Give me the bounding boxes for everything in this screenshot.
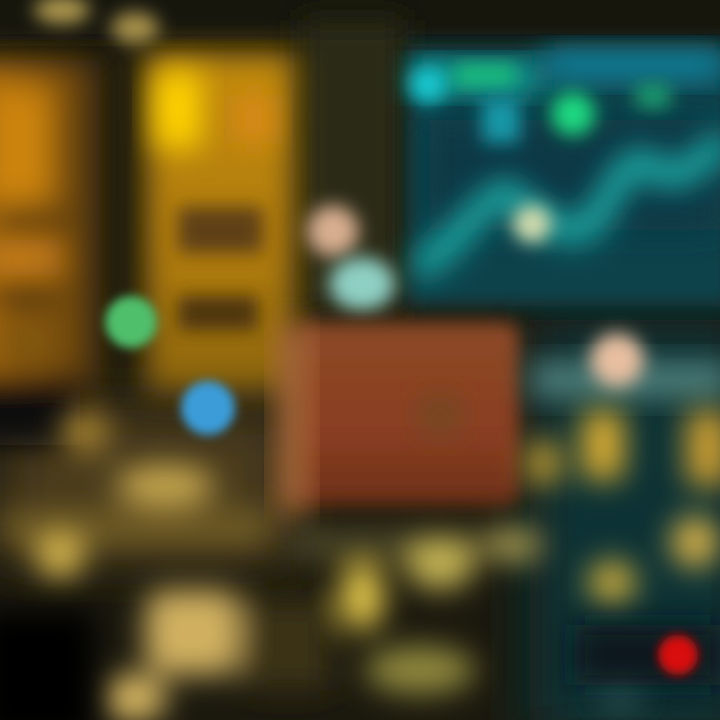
- panel: center golden shelf: [145, 52, 295, 392]
- icon: green dot: [105, 296, 157, 348]
- grey teal band: [530, 362, 720, 398]
- bright yellow book: [155, 72, 201, 148]
- icon: blue dot: [181, 381, 235, 435]
- panel: chart screen: [408, 44, 720, 306]
- figure: small person: [307, 205, 395, 311]
- green blob: [455, 65, 515, 85]
- icon: red dot: [658, 635, 698, 675]
- coins: lower gold pile: [0, 410, 644, 720]
- shelf slot lower: [178, 296, 258, 330]
- icon: wallet: [278, 322, 520, 515]
- green marker: [551, 92, 595, 136]
- panel: left golden shelf: [0, 60, 100, 445]
- dark corner bottom left: [0, 610, 95, 720]
- cyan blob: [410, 67, 446, 103]
- body: [329, 257, 395, 311]
- coins: right gold stacks: [525, 410, 720, 604]
- head: [590, 333, 644, 387]
- teal block: [482, 98, 520, 143]
- coins: top lights: [34, 0, 159, 44]
- dark block bottom right: [575, 625, 720, 685]
- shelf slot upper: [178, 207, 263, 253]
- orange book: [235, 95, 273, 143]
- chart line: [415, 140, 720, 268]
- figure: right person: [530, 333, 720, 398]
- chart header bar: [412, 64, 542, 92]
- head: [307, 205, 359, 257]
- chart marker: [513, 205, 551, 243]
- wallet clasp: [420, 395, 460, 435]
